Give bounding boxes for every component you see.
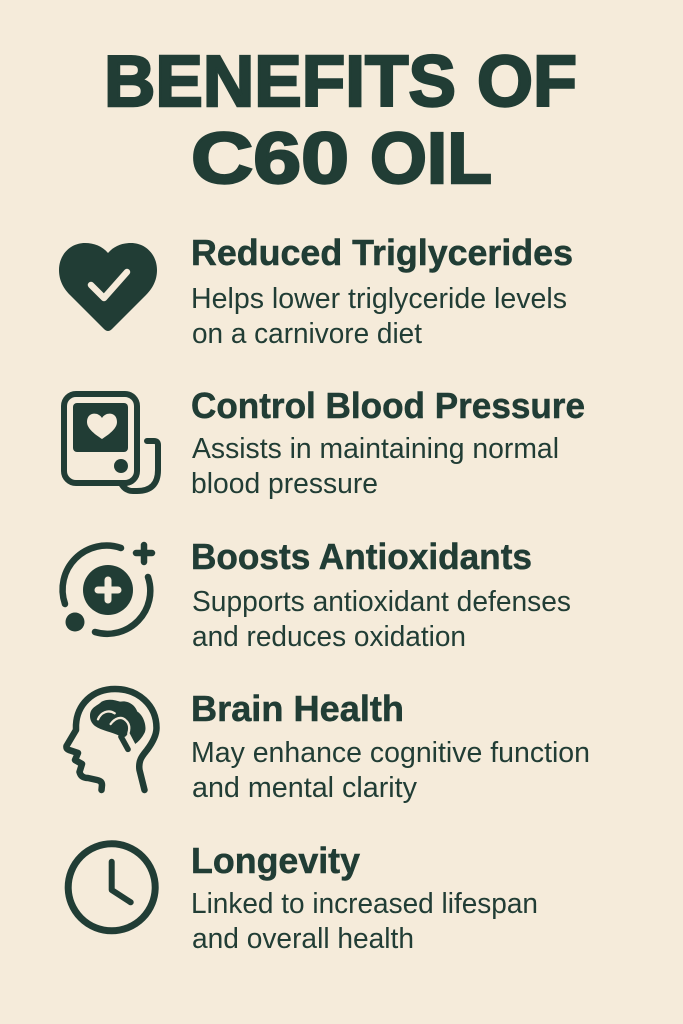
icon: antioxidant molecule <box>63 545 152 634</box>
heading: control blood pressure: Control Blood Pressure <box>191 385 585 426</box>
text: longevity description <box>191 888 538 955</box>
text: control blood pressure description: blood pressure <box>191 468 378 500</box>
heading: longevity: Longevity <box>191 840 360 881</box>
icon: heart with check mark <box>59 243 157 331</box>
icon: head with brain <box>66 689 156 790</box>
text: brain health description: May enhance cognitive function <box>191 737 590 769</box>
title: C60 <box>191 119 349 199</box>
text: reduced triglycerides description: on a carnivore diet <box>192 318 422 350</box>
icon: blood pressure monitor <box>64 394 158 491</box>
text: longevity description: and overall health <box>192 923 414 955</box>
text: brain health description: and mental clarity <box>192 772 418 804</box>
title: OF <box>477 42 577 122</box>
heading: reduced triglycerides: Reduced Triglycerides <box>191 232 573 273</box>
text: brain health description <box>191 737 590 804</box>
text: boosts antioxidants description <box>192 586 571 653</box>
text: boosts antioxidants description: Supports antioxidant defenses <box>192 586 571 618</box>
icon: clock <box>68 844 155 931</box>
text: control blood pressure description: Assists in maintaining normal <box>192 433 559 465</box>
text: boosts antioxidants description: and reduces oxidation <box>192 621 466 653</box>
heading: boosts antioxidants: Boosts Antioxidants <box>191 536 532 577</box>
panel: longevity <box>68 840 538 955</box>
text: longevity description: Linked to increased lifespan <box>191 888 538 920</box>
title: BENEFITS <box>104 42 456 122</box>
panel: reduced triglycerides <box>59 232 573 350</box>
title: OIL <box>370 119 492 199</box>
text: reduced triglycerides description <box>191 283 567 350</box>
title <box>104 42 577 199</box>
panel: brain health <box>66 688 590 804</box>
text: control blood pressure description <box>191 433 559 500</box>
text: reduced triglycerides description: Helps lower triglyceride levels <box>191 283 567 315</box>
panel: control blood pressure <box>64 385 585 500</box>
heading: brain health: Brain Health <box>191 688 404 729</box>
panel: boosts antioxidants <box>63 536 571 653</box>
